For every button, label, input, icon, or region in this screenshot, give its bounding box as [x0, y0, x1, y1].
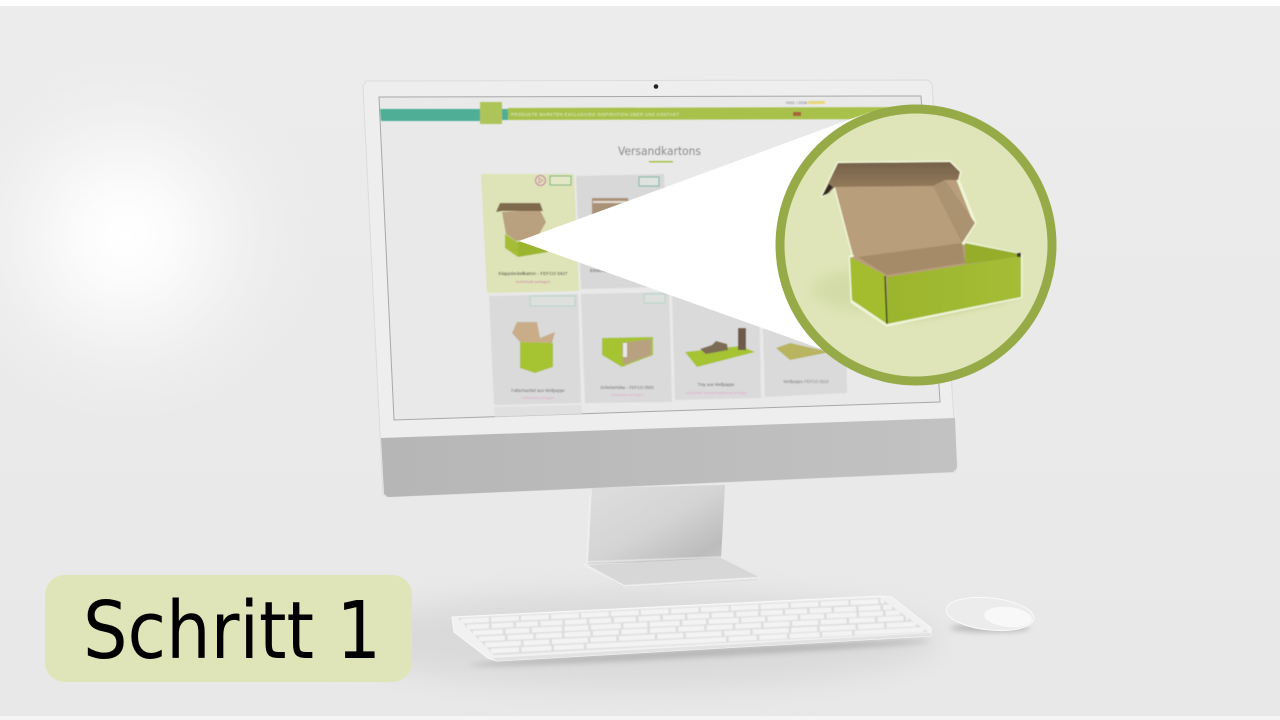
- product card: wellpappe: [762, 288, 847, 397]
- box front: [887, 256, 1021, 324]
- website header bar: [380, 100, 923, 124]
- box shadow: [812, 268, 948, 312]
- step label: Schritt 1: [83, 585, 381, 677]
- product card: wellpappe: Wellpappe FEFCO 0110: [783, 379, 829, 384]
- product card: tray: Individuelle Verpackungslösung anfragen: [685, 391, 747, 395]
- lid flap: [933, 180, 975, 243]
- product card: Klappdeckelkarton: Klappdeckelkarton - FEFCO 0427: [499, 271, 568, 276]
- magnified circle: [780, 109, 1052, 381]
- monitor: [363, 80, 957, 497]
- product card: schiebehülse: Schiebehülse - FEFCO 0503: [600, 385, 654, 390]
- product card: Klappdeckelkarton: [481, 174, 579, 293]
- box left side: [850, 257, 887, 324]
- enlarged box icon: [822, 162, 1021, 325]
- product card: second: Einschubkarton: [590, 268, 622, 273]
- screen: [379, 96, 940, 420]
- monitor stand: [584, 485, 757, 587]
- page title: Versandkartons: [618, 144, 701, 158]
- desk shadow: [340, 592, 940, 688]
- product card: faltkiste: [489, 294, 581, 405]
- box glow outline: [822, 162, 1021, 325]
- mouse: [945, 593, 1035, 635]
- product card: faltkiste: Faltschachtel aus Wellpappe: [511, 388, 565, 393]
- website header bar: 0931 / 2538: [786, 100, 808, 105]
- keyboard: [452, 596, 931, 669]
- product card: tray: Tray aus Wellpappe: [697, 382, 735, 387]
- product card: tray: [672, 290, 761, 400]
- product card: schiebehülse: [581, 292, 672, 403]
- monitor chin: [381, 418, 957, 497]
- lid interior: [835, 186, 962, 257]
- monitor body: [363, 80, 957, 497]
- next row cards peek: [494, 405, 582, 417]
- product card: Klappdeckelkarton: Individuell anfragen: [516, 279, 550, 284]
- website header bar: PRODUKTE MARKTEN EXCLUSIVES INSPIRATION ÜBER UNS KONTAKT: [511, 112, 679, 117]
- product card: second: [576, 174, 668, 289]
- website screenshot: [380, 100, 923, 417]
- product card: faltkiste: Individuell anfragen: [522, 396, 554, 400]
- lid underside: [822, 162, 960, 196]
- box inner back: [858, 243, 965, 275]
- white magnifier beam: [519, 112, 880, 370]
- webcam: [654, 84, 658, 89]
- inner right wall: [965, 243, 1020, 264]
- product card: schiebehülse: Individuell anfragen: [611, 393, 643, 397]
